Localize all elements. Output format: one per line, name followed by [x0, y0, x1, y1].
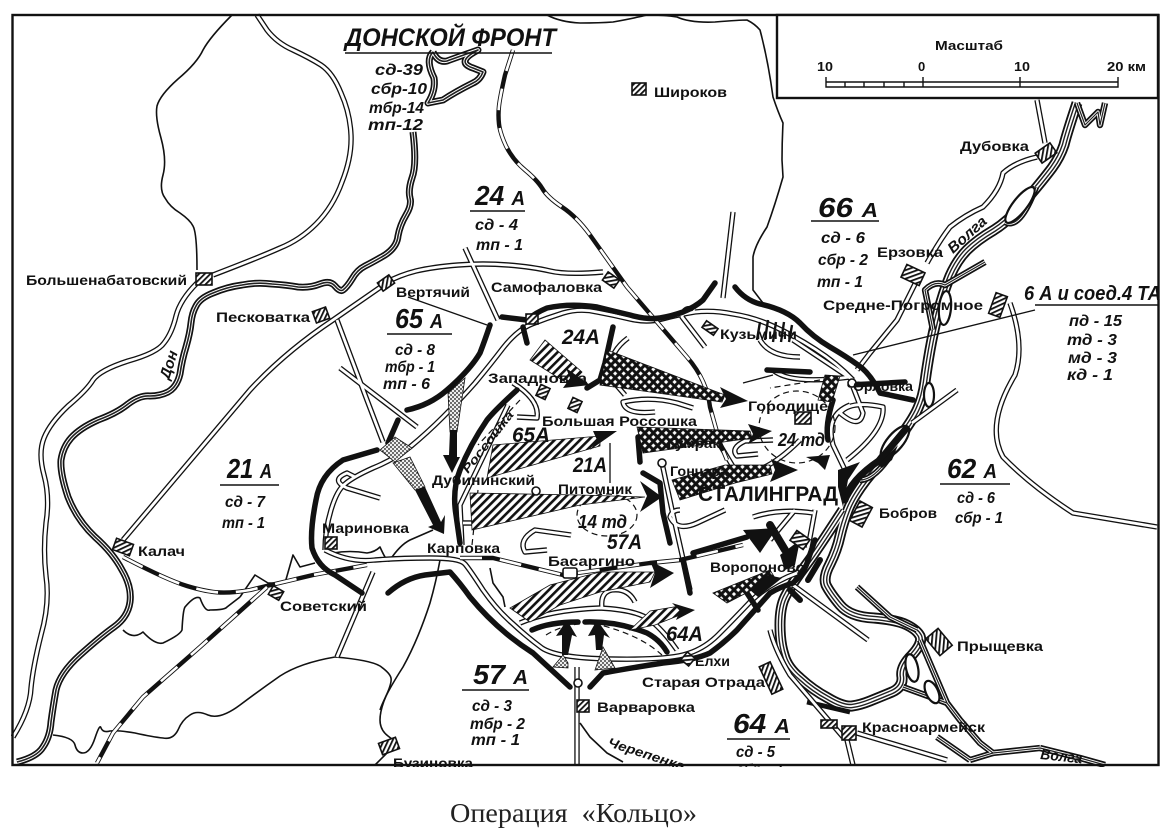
army block: 24 A: тп - 1: [476, 237, 523, 254]
place names: Орловка: [853, 379, 914, 394]
army block: Don Front: сбр-10: [371, 81, 427, 98]
army block: 57 A: 57 А: [473, 659, 528, 690]
army block: 21 A: 21 А: [226, 453, 272, 484]
railways: [97, 50, 743, 763]
thin leader lines: [408, 297, 1035, 483]
army block: 65 A: тп - 6: [383, 376, 430, 393]
inner army labels: 57А: [607, 531, 642, 554]
place names: Городище: [748, 399, 829, 414]
army block: Don Front: тп-12: [368, 117, 423, 134]
place names: Гумрак: [667, 436, 720, 451]
Volga side channels: [857, 103, 1105, 765]
inner army labels: 65А: [512, 424, 550, 447]
place names: Басаргино: [548, 554, 635, 569]
hatched ticks at Kuzmichi: [757, 320, 792, 342]
place names: Варваровка: [597, 700, 696, 715]
inner army labels: 24 тд: [777, 430, 825, 450]
army block: 66 A: сд - 6: [821, 230, 865, 247]
thin rivers and streams: [53, 15, 783, 765]
place names: Дубининский: [432, 473, 535, 488]
place names: [26, 85, 1044, 771]
army block: 65 A: сд - 8: [395, 342, 435, 359]
army block: 6 A and 4 TA units: пд - 15: [1069, 313, 1123, 330]
army block: 6 A and 4 TA units: тд - 3: [1067, 332, 1117, 349]
place names: Большенабатовский: [26, 273, 187, 288]
place names: Прыщевка: [957, 639, 1044, 654]
place names: Советский: [280, 599, 367, 614]
army block: 64 A: 64 А: [733, 708, 790, 739]
army block: 62 A: сд - 6: [957, 490, 995, 507]
river names: Волга: [944, 213, 991, 257]
place names: Бобров: [879, 506, 937, 521]
army block: 64 A: сбр - 7: [736, 762, 783, 779]
army block: 62 A: сбр - 1: [955, 510, 1003, 527]
army block: 62 A: [940, 453, 1010, 527]
army block: Don Front: ДОНСКОЙ ФРОНТ: [343, 22, 559, 52]
army block: 24 A: сд - 4: [475, 217, 518, 234]
Volga islands: [876, 183, 1039, 705]
attack arrows: cross-hatched wedges: [600, 350, 840, 603]
army block: 65 A: [383, 303, 452, 393]
river names: [156, 213, 1083, 774]
station circles: [532, 379, 856, 687]
army block: 6 A and 4 TA units: [1024, 283, 1161, 384]
place names: Западновка: [488, 371, 588, 386]
place names: Самофаловка: [491, 280, 603, 295]
army block: 6 A and 4 TA units: кд - 1: [1067, 367, 1113, 384]
place names: Широков: [654, 85, 727, 100]
place names: Средне-Погромное: [823, 298, 984, 313]
army block: 21 A: сд - 7: [225, 494, 266, 511]
army block: 24 A: [470, 180, 525, 254]
place names: Красноармейск: [862, 720, 985, 735]
dashed fronts around encircled group: [472, 380, 835, 655]
scale box: [777, 15, 1158, 98]
scale box: 20 км: [1107, 59, 1146, 74]
army block: 66 A: тп - 1: [817, 274, 863, 291]
army block: 24 A: 24 А: [474, 180, 525, 211]
place names: Старая Отрада: [642, 675, 766, 690]
army block: 57 A: сд - 3: [472, 698, 512, 715]
army block: 66 A: 66 А: [818, 192, 878, 223]
place names: Калач: [138, 544, 185, 559]
place names: Ерзовка: [877, 245, 944, 260]
army block: 57 A: тбр - 2: [470, 716, 525, 733]
place names: Питомник: [558, 482, 632, 497]
inner army labels: 14 тд: [578, 512, 627, 532]
front line: thick black segments: [312, 283, 913, 687]
attack arrows: black heads and shafts: [415, 368, 898, 655]
place names: Дубовка: [960, 139, 1030, 154]
scale box: 0: [918, 59, 925, 74]
army block: 6 A and 4 TA units: мд - 3: [1068, 350, 1117, 367]
place names: Большая Россошка: [542, 414, 698, 429]
army block: 66 A: сбр - 2: [818, 252, 868, 269]
river Volga: [780, 103, 1077, 706]
inner army labels: 21А: [572, 454, 607, 477]
capsule channel near Krasnoarmeysk: [807, 702, 850, 712]
attack arrows: hatched wedges: [470, 340, 680, 630]
scale box: 10: [1014, 59, 1030, 74]
inner army labels: 64А: [666, 623, 703, 646]
army block: 21 A: тп - 1: [222, 515, 265, 532]
army block: 57 A: [462, 659, 529, 749]
inner army labels: 24А: [561, 326, 600, 349]
river names: Россошка: [459, 408, 517, 476]
scale box: Масштаб: [935, 38, 1003, 53]
army block: 62 A: 62 А: [947, 453, 997, 484]
army block: Don Front: тбр-14: [369, 100, 424, 117]
army block: 57 A: тп - 1: [471, 732, 520, 749]
army block: 64 A: [727, 708, 790, 779]
place names: Бузиновка: [393, 756, 474, 771]
army block: Don Front: сд-39: [375, 62, 423, 79]
army block: 65 A: тбр - 1: [385, 359, 435, 376]
place names: Гончара: [670, 464, 729, 479]
river names: Дон: [156, 348, 182, 383]
river Don: [17, 50, 483, 762]
army block: 66 A: [811, 192, 879, 291]
settlement markers: [112, 83, 1057, 755]
army block: 65 A: 65 А: [395, 303, 443, 334]
army block: 64 A: сд - 5: [736, 744, 776, 761]
caption: Операция «Кольцо»: [450, 798, 697, 828]
place names: Елхи: [695, 654, 730, 669]
place names: Кузьмичи: [720, 327, 797, 342]
place names: Карповка: [427, 541, 501, 556]
river names: Волга: [1040, 746, 1083, 767]
inner army labels: [512, 326, 825, 646]
attack arrows: stippled wedges: [380, 378, 615, 670]
place names: Воропоново: [710, 560, 805, 575]
place names: Мариновка: [322, 521, 410, 536]
scale box: 10: [817, 59, 833, 74]
army block: Don Front: [343, 22, 559, 134]
place names: Песковатка: [216, 310, 311, 325]
place names: Вертячий: [396, 285, 470, 300]
city label Stalingrad: СТАЛИНГРАД: [698, 483, 838, 506]
river names: Черепенка: [606, 735, 687, 774]
army block: 21 A: [220, 453, 279, 532]
